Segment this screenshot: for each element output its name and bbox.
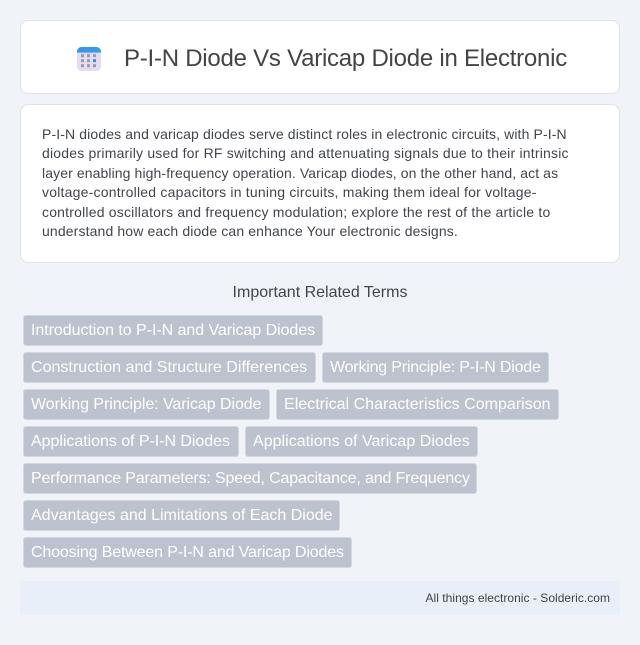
tag list: Advantages and Limitations of Each Diode — [31, 507, 333, 524]
tag list: Working Principle: Varicap Diode — [31, 396, 261, 413]
panel: intro text: understand how each diode can enhance Your electronic designs. — [42, 223, 458, 239]
panel: intro text: P-I-N diodes and varicap diodes serve distinct roles in electronic circuits, with P-I-N — [42, 126, 567, 142]
tag list: Applications of P-I-N Diodes — [31, 433, 230, 450]
footer — [20, 581, 620, 615]
heading: related terms: Important Related Terms — [233, 284, 407, 301]
icon: calendar — [77, 47, 101, 71]
tag list: Applications of Varicap Diodes — [253, 433, 470, 450]
panel: intro text: diodes primarily used for RF switching and attenuating signals due to their intrinsic — [42, 145, 569, 161]
footer: All things electronic - Solderic.com — [426, 591, 610, 605]
panel: intro text: layer enabling high-frequency operation. Varicap diodes, on the other hand, act as — [42, 165, 558, 181]
title: P-I-N Diode Vs Varicap Diode in Electronic — [124, 45, 567, 72]
tag list: Choosing Between P-I-N and Varicap Diodes — [31, 544, 344, 561]
header panel — [20, 20, 620, 94]
tag list: Working Principle: P-I-N Diode — [330, 359, 541, 376]
panel: intro text — [20, 104, 620, 263]
panel: intro text: controlled oscillators and frequency modulation; explore the rest of the article to — [42, 204, 550, 220]
tag list: Construction and Structure Differences — [31, 359, 307, 376]
tag list — [23, 315, 559, 568]
tag list: Electrical Characteristics Comparison — [284, 396, 551, 413]
tag list: Introduction to P-I-N and Varicap Diodes — [31, 322, 315, 339]
tag list: Performance Parameters: Speed, Capacitance, and Frequency — [31, 470, 470, 487]
panel: intro text: voltage-controlled capacitors in tuning circuits, making them ideal for voltage- — [42, 184, 537, 200]
